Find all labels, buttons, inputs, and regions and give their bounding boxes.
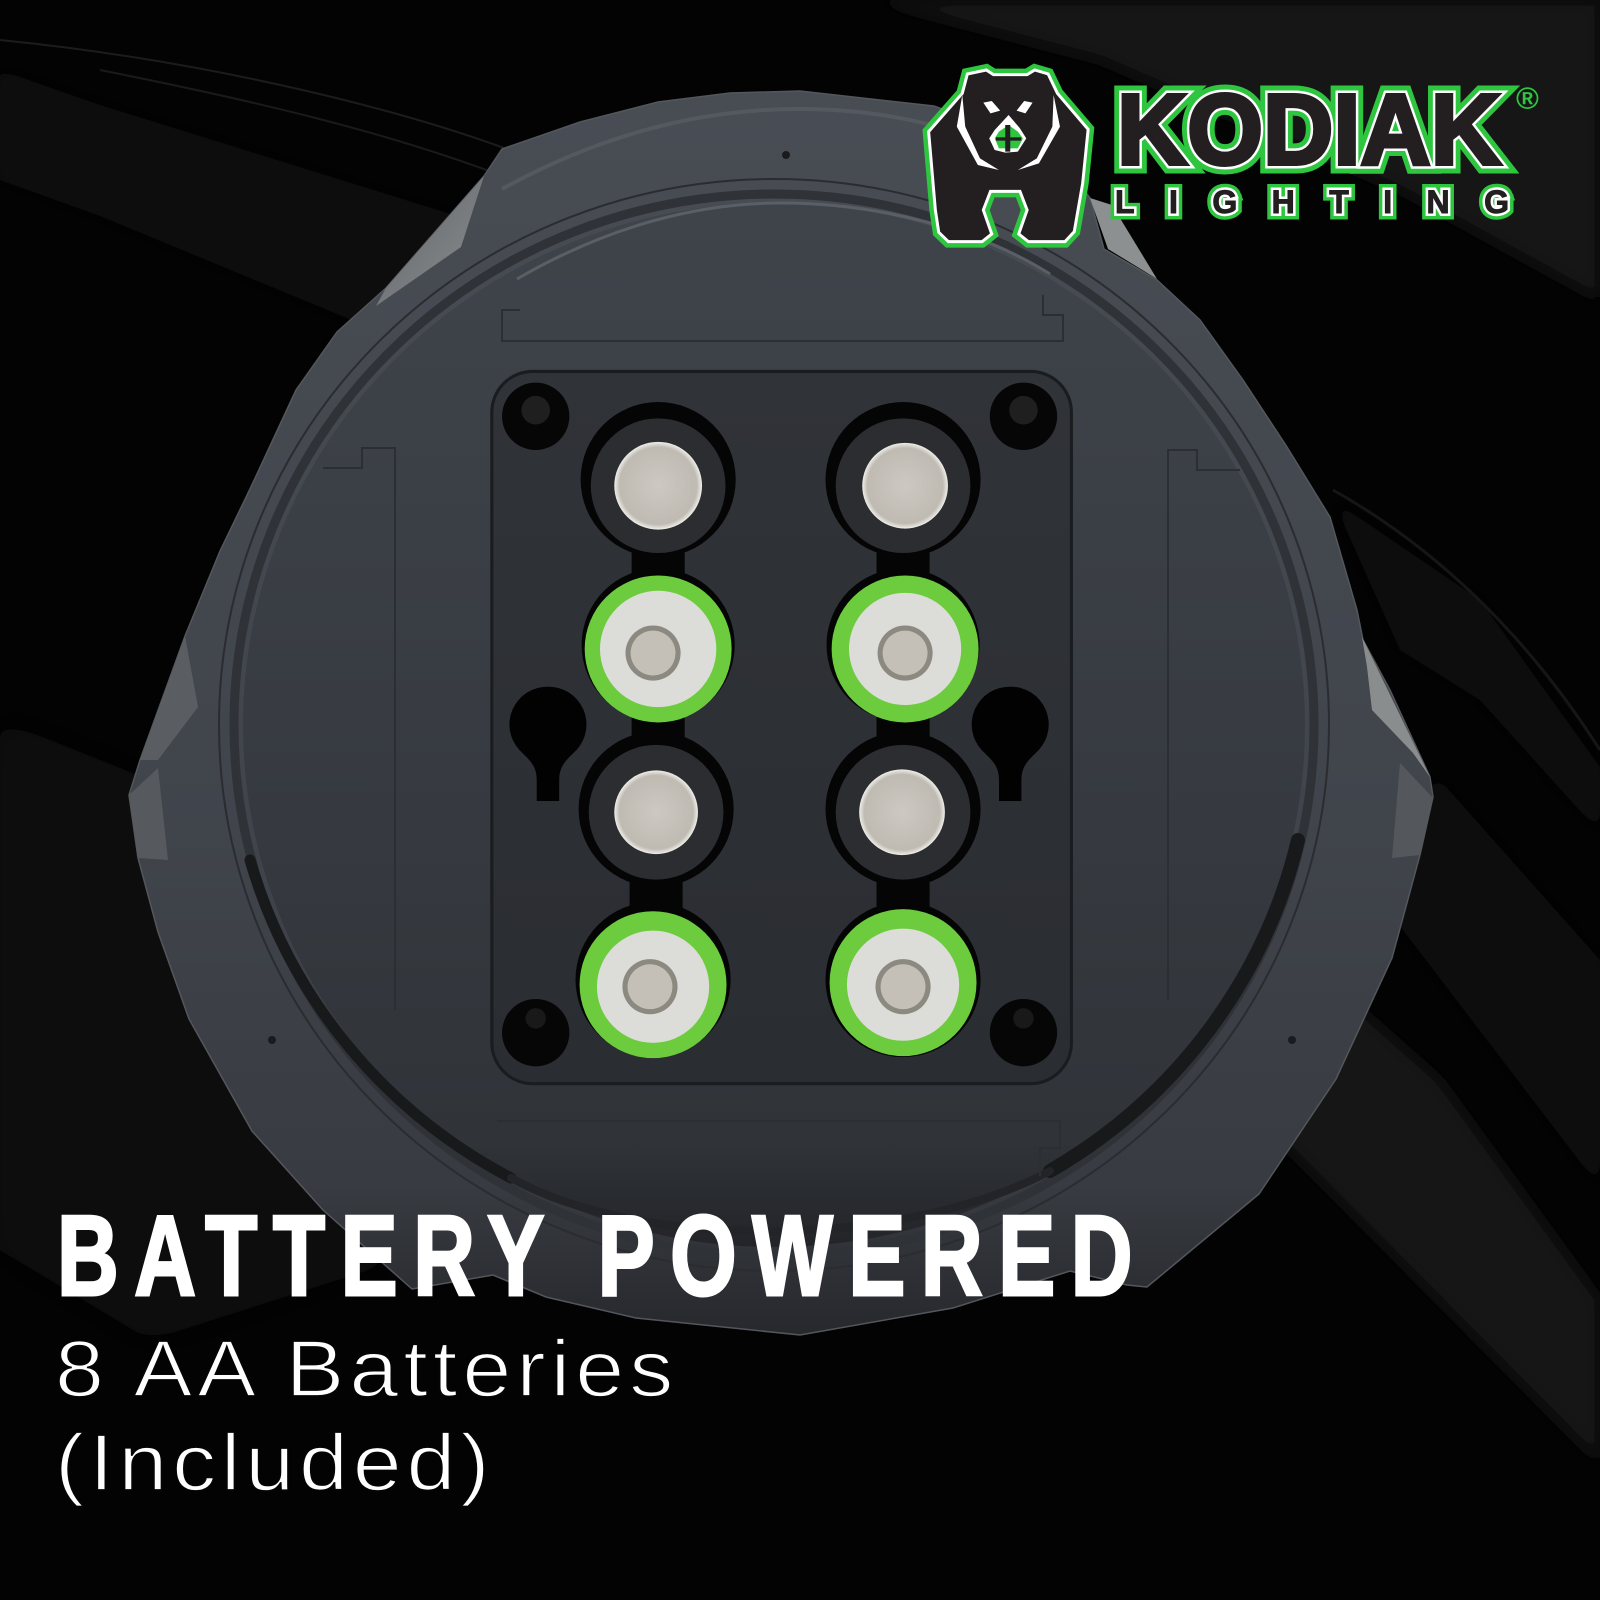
product outer body xyxy=(129,91,1433,1335)
battery wells xyxy=(576,402,981,1057)
battery compartment xyxy=(492,371,1071,1084)
keyholes xyxy=(509,687,1049,801)
logo wordmark KODIAK: KODIAK xyxy=(1117,74,1501,186)
battery plate xyxy=(492,371,1071,1084)
logo wordmark LIGHTING: LIGHTING xyxy=(1115,184,1509,220)
product rim rings xyxy=(219,109,1329,1271)
battery terminals: negative ends xyxy=(589,418,970,880)
logo xyxy=(929,70,1539,242)
floor grooves xyxy=(250,840,1298,1231)
screws xyxy=(502,383,1057,1066)
logo wordmark KODIAK: KODIAK xyxy=(1117,74,1501,186)
product: battery base xyxy=(129,91,1433,1335)
subheading line 1: 8 AA Batteries xyxy=(55,1324,673,1413)
logo wordmark LIGHTING: LIGHTING xyxy=(1115,184,1509,220)
logo wordmark LIGHTING: LIGHTING xyxy=(1115,184,1509,220)
floor rim highlight xyxy=(517,203,1050,279)
floor engraved marks xyxy=(323,295,1240,1176)
logo wordmark KODIAK: KODIAK xyxy=(1117,74,1501,186)
product inner floor xyxy=(243,203,1305,1247)
subheading line 2: (Included) xyxy=(55,1418,490,1507)
heading: BATTERY POWERED xyxy=(57,1193,1133,1320)
battery green rings xyxy=(580,576,979,1058)
logo bear icon xyxy=(929,70,1088,242)
product chamfers xyxy=(129,176,1433,860)
registered mark: ® xyxy=(1516,81,1539,116)
dimples xyxy=(268,151,1296,1044)
